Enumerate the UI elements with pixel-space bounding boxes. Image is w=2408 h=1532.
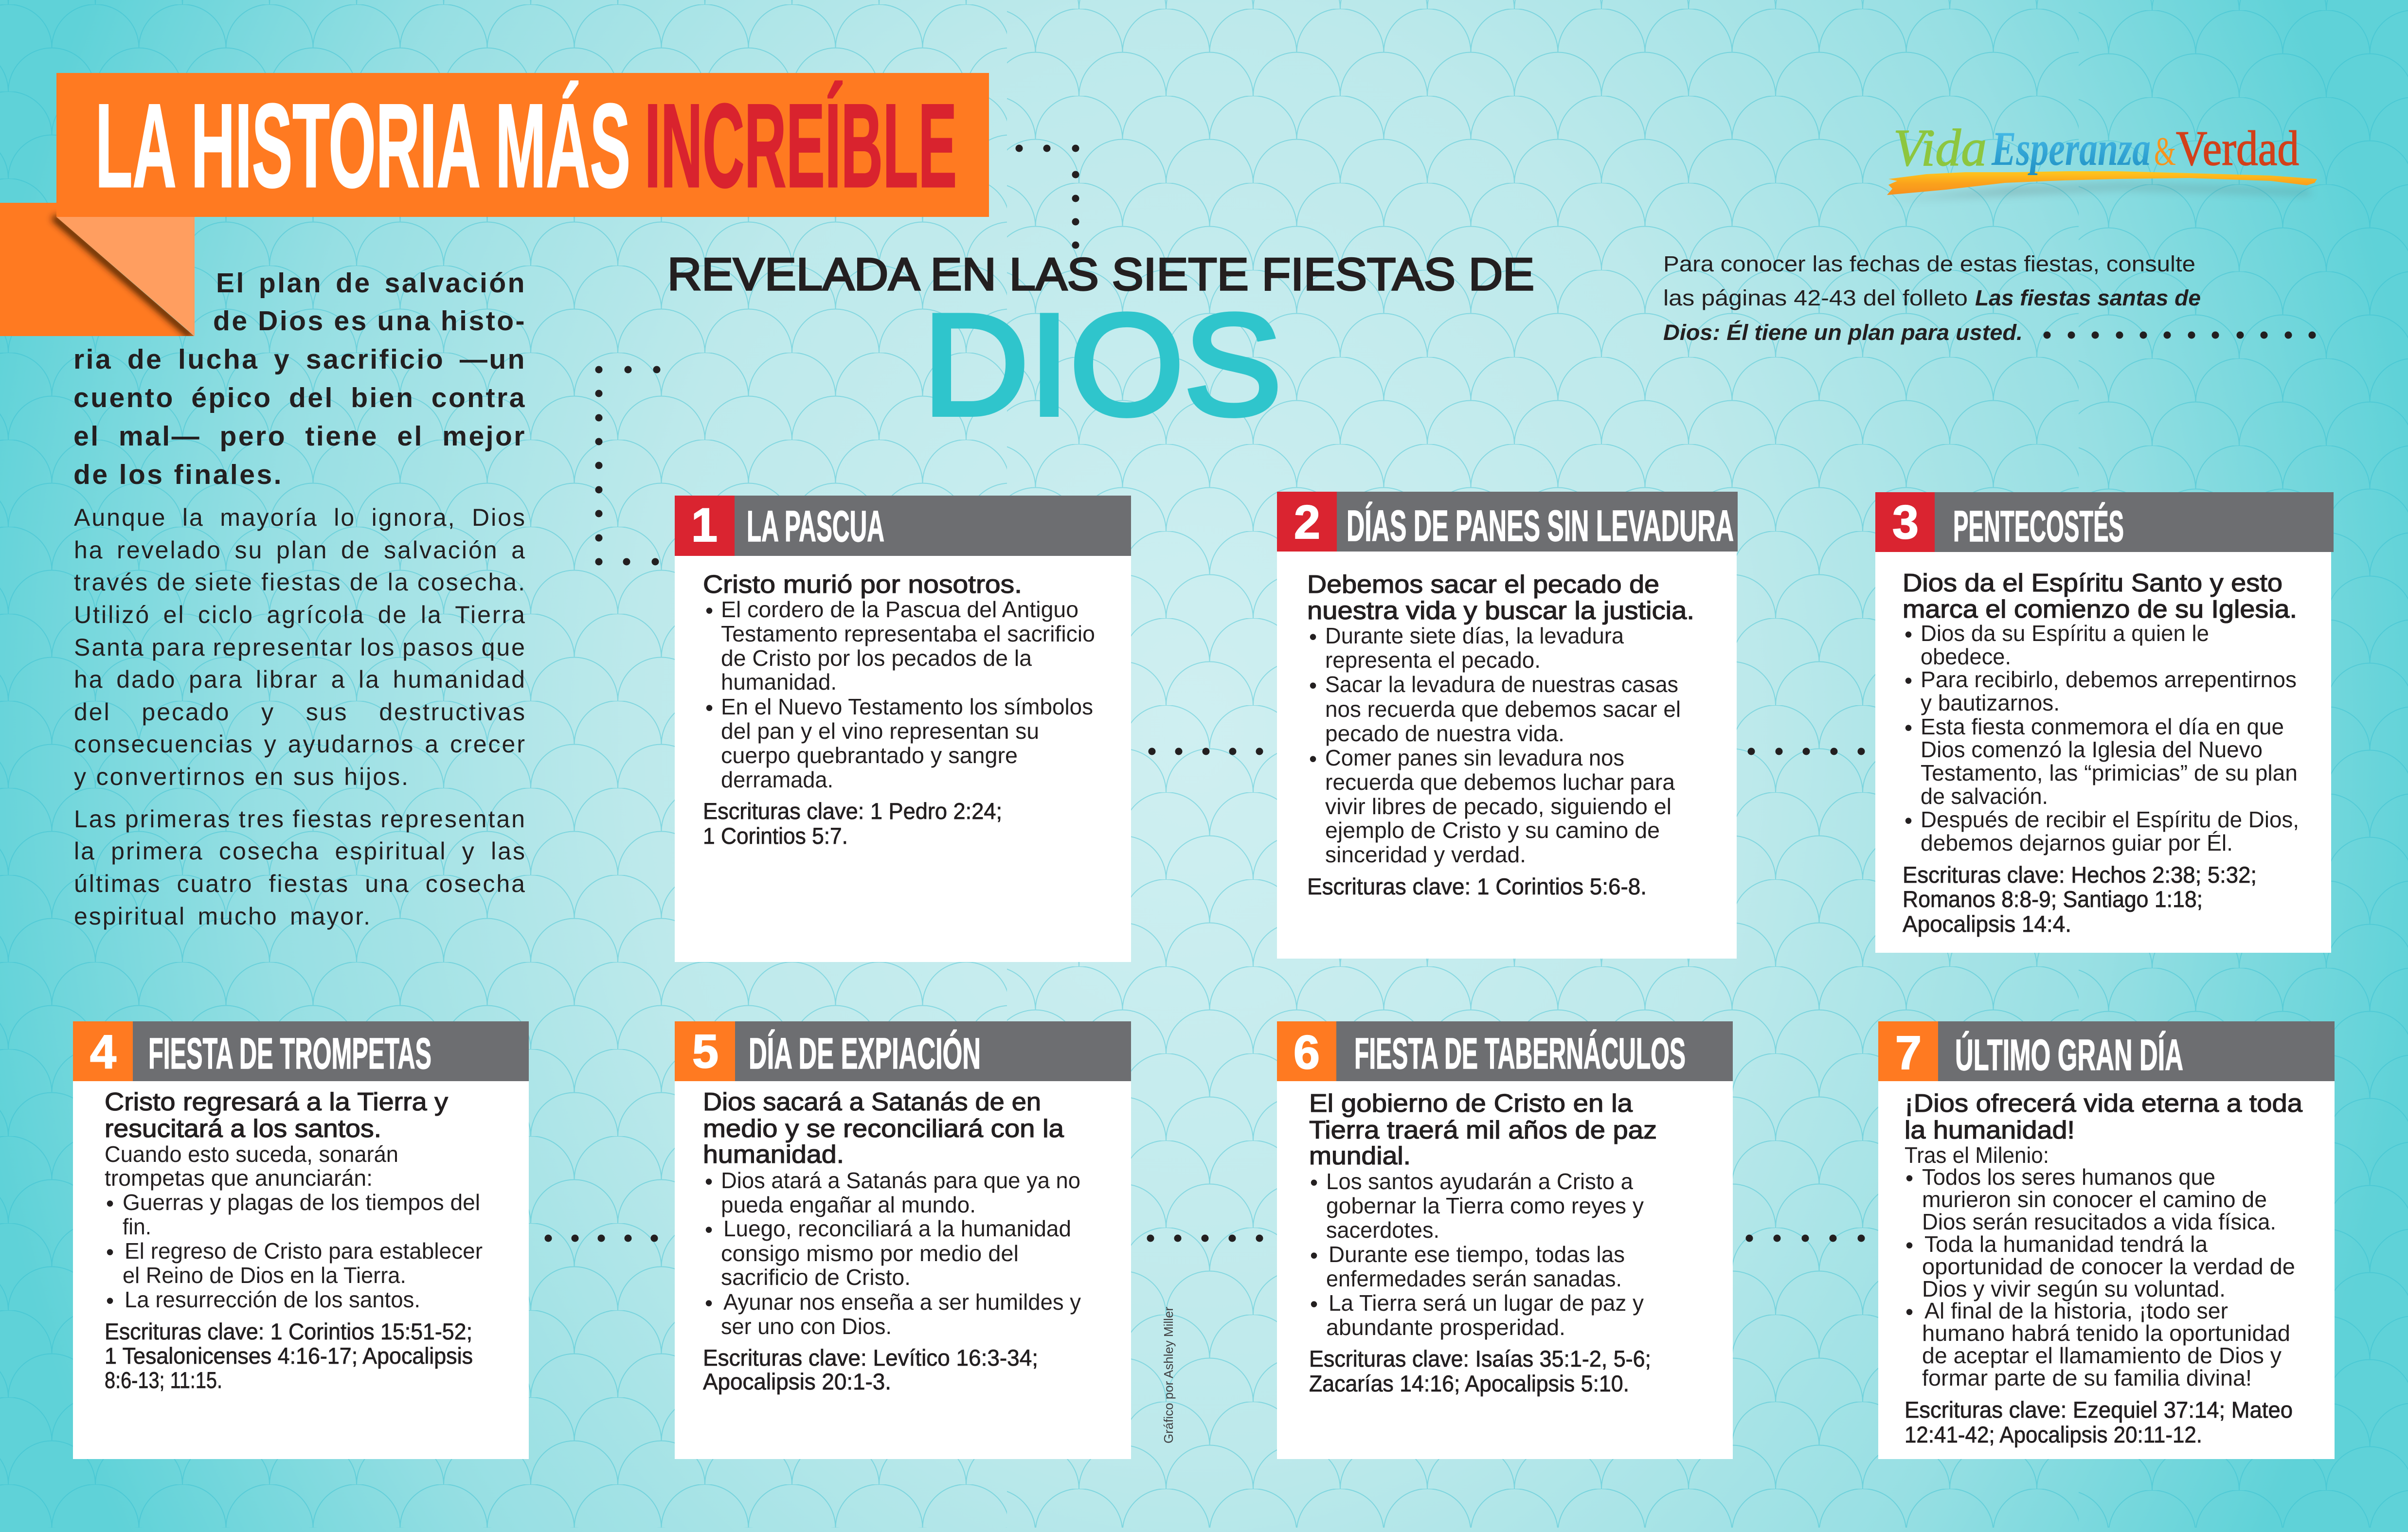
panel: card 7 Último Gran Día: Al final de la historia, ¡todo ser [1924,1298,2228,1323]
note: festival dates: las páginas 42-43 del folleto [1663,285,1968,310]
panel: card 6 Fiesta de Tabernáculos [1277,1021,1733,1459]
panel: card 7 Último Gran Día: ÚLTIMO GRAN DÍA [1955,1031,2183,1080]
panel: card 7 Último Gran Día: formar parte de su familia divina! [1922,1365,2252,1390]
panel: card 4 Fiesta de Trompetas: El regreso de Cristo para establecer [125,1238,483,1264]
dotted connector: card 6 to card 7 [1745,1234,1865,1242]
panel: card 7 Último Gran Día: Dios y vivir según su voluntad. [1922,1276,2226,1301]
panel: card 2 Días de panes sin levadura: Debemos sacar el pecado de [1307,570,1659,599]
panel: card 7 Último Gran Día: Dios serán resucitados a vida física. [1922,1209,2276,1234]
panel: card 2 Días de panes sin levadura: representa el pecado. [1325,647,1541,673]
heading: DIOS: DIOS [923,284,1282,445]
panel: card 6 Fiesta de Tabernáculos: • [1310,1291,1318,1317]
panel: card 4 Fiesta de Trompetas: • [106,1239,114,1265]
panel: card 5 Día de Expiación: humanidad. [703,1140,844,1169]
dotted connector: card 4 to card 5 [545,1234,658,1242]
panel: card 1 La Pascua: Cristo murió por nosotros. [703,570,1022,599]
panel: card 2 Días de panes sin levadura: Durante siete días, la levadura [1325,623,1624,648]
panel: card 5 Día de Expiación: Dios atará a Satanás para que ya no [721,1168,1080,1193]
intro: bold lead paragraph: de los finales. [73,459,283,490]
logo: Vida Esperanza y Verdad: Verdad [2176,121,2299,176]
panel: card 4 Fiesta de Trompetas: 4 [90,1025,116,1078]
panel: card 6 Fiesta de Tabernáculos: • [1310,1170,1318,1195]
intro: body text: Aunque la mayoría lo ignora, Dios [74,504,526,531]
panel: card 5 Día de Expiación [675,1021,1131,1459]
dotted connector: card 5 to card 6 [1147,1234,1263,1242]
panel: card 3 Pentecostés: PENTECOSTÉS [1953,502,2124,551]
panel: card 1 La Pascua: humanidad. [721,669,837,695]
panel: card 1 La Pascua: Testamento representaba el sacrificio [721,621,1095,646]
panel: card 2 Días de panes sin levadura: Comer panes sin levadura nos [1325,745,1624,770]
panel: card 7 Último Gran Día: humano habrá tenido la oportunidad [1922,1320,2290,1346]
panel: card 1 La Pascua: En el Nuevo Testamento los símbolos [721,694,1093,719]
panel: card 4 Fiesta de Trompetas: el Reino de Dios en la Tierra. [123,1263,406,1288]
panel: card 2 Días de panes sin levadura: Escrituras clave: 1 Corintios 5:6-8. [1307,873,1647,899]
panel: card 3 Pentecostés: • [1905,715,1912,740]
panel: card 3 Pentecostés: de salvación. [1921,784,2048,809]
panel: card 3 Pentecostés: Dios da el Espíritu Santo y esto [1903,569,2282,597]
panel: card 3 Pentecostés: Testamento, las “primicias” de su plan [1921,760,2298,785]
panel: card 5 Día de Expiación: 5 [692,1025,719,1078]
panel: card 4 Fiesta de Trompetas: • [106,1288,114,1313]
logo: Vida Esperanza y Verdad: & [2154,129,2176,174]
panel: card 6 Fiesta de Tabernáculos: Zacarías 14:16; Apocalipsis 5:10. [1309,1371,1629,1396]
panel: card 1 La Pascua: 1 [691,499,718,552]
panel: card 4 Fiesta de Trompetas: Cristo regresará a la Tierra y [105,1088,448,1116]
panel: card 3 Pentecostés: Dios da su Espíritu a quien le [1921,621,2209,646]
intro: body text: del pecado y sus destructivas [74,698,526,726]
panel: card 5 Día de Expiación: • [705,1217,713,1242]
panel: card 7 Último Gran Día: • [1905,1232,1913,1258]
panel: card 6 Fiesta de Tabernáculos: La Tierra será un lugar de paz y [1329,1290,1644,1316]
panel: card 5 Día de Expiación: Luego, reconciliará a la humanidad [723,1216,1071,1241]
panel: card 3 Pentecostés: Apocalipsis 14:4. [1903,911,2071,937]
panel: card 6 Fiesta de Tabernáculos: Los santos ayudarán a Cristo a [1326,1169,1633,1194]
panel: card 6 Fiesta de Tabernáculos: mundial. [1309,1142,1411,1170]
panel: card 1 La Pascua: LA PASCUA [747,502,884,551]
title banner: INCREÍBLE [645,79,957,212]
note: festival dates: Dios: Él tiene un plan para usted. [1663,320,2023,345]
panel: card 5 Día de Expiación: • [705,1169,713,1194]
panel: card 4 Fiesta de Trompetas: Escrituras clave: 1 Corintios 15:51-52; [105,1318,472,1344]
panel: card 7 Último Gran Día [1878,1021,2335,1459]
panel: card 5 Día de Expiación: Apocalipsis 20:1-3. [703,1369,891,1394]
intro: body text: y convertirnos en sus hijos. [74,763,410,790]
panel: card 7 Último Gran Día: murieron sin conocer el camino de [1922,1187,2267,1212]
panel: card 1 La Pascua: • [705,695,713,720]
panel: card 5 Día de Expiación: pueda engañar al mundo. [721,1192,976,1217]
panel: card 3 Pentecostés: Escrituras clave: Hechos 2:38; 5:32; [1903,862,2257,888]
note: festival dates [1663,251,2201,345]
panel: card 2 Días de panes sin levadura: ejemplo de Cristo y su camino de [1325,818,1660,843]
intro: body text: la primera cosecha espiritual y las [74,837,526,865]
panel: card 2 Días de panes sin levadura: Sacar la levadura de nuestras casas [1325,672,1678,697]
panel: card 3 Pentecostés: • [1905,808,1912,833]
panel: card 1 La Pascua [675,496,1131,962]
intro: bold lead paragraph [73,267,526,490]
title banner: LA HISTORIA MÁS [95,79,630,212]
panel: card 6 Fiesta de Tabernáculos: sacerdotes. [1326,1217,1439,1243]
note: festival dates: Las fiestas santas de [1975,285,2201,310]
panel: card 4 Fiesta de Trompetas: • [106,1191,114,1216]
panel: card 4 Fiesta de Trompetas: FIESTA DE TROMPETAS [148,1030,431,1078]
panel: card 2 Días de panes sin levadura: pecado de nuestra vida. [1325,721,1564,746]
intro: body text: Santa para representar los pasos que [74,634,526,661]
panel: card 1 La Pascua: cuerpo quebrantado y sangre [721,743,1018,768]
panel: card 7 Último Gran Día: • [1905,1165,1913,1191]
logo: Vida Esperanza y Verdad [1887,119,2317,199]
logo: Vida Esperanza y Verdad: Esperanza [1991,122,2151,176]
panel: card 3 Pentecostés: Después de recibir el Espíritu de Dios, [1921,807,2299,832]
panel: card 7 Último Gran Día: oportunidad de conocer la verdad de [1922,1254,2295,1279]
intro: body text [74,504,526,930]
dotted connector: card 2 to card 3 [1747,748,1865,755]
panel: card 3 Pentecostés: obedece. [1921,644,2011,669]
intro: body text: Las primeras tres fiestas representan [74,805,526,833]
panel: card 5 Día de Expiación: sacrificio de Cristo. [721,1265,911,1290]
panel: card 4 Fiesta de Trompetas: fin. [123,1214,151,1239]
panel: card 1 La Pascua: derramada. [721,767,833,792]
intro: body text: espiritual mucho mayor. [74,903,372,930]
panel: card 2 Días de panes sin levadura: nuestra vida y buscar la justicia. [1307,597,1694,625]
note: festival dates: Para conocer las fechas de estas fiestas, consulte [1663,251,2195,276]
panel: card 5 Día de Expiación: consigo mismo por medio del [721,1241,1019,1266]
panel: card 3 Pentecostés: Dios comenzó la Iglesia del Nuevo [1921,737,2263,762]
logo: Vida Esperanza y Verdad: Vida [1893,119,1987,177]
intro: body text: últimas cuatro fiestas una cosecha [74,870,526,897]
panel: card 7 Último Gran Día: la humanidad! [1905,1116,2075,1144]
panel: card 5 Día de Expiación: ser uno con Dios. [721,1314,892,1339]
panel: card 2 Días de panes sin levadura: recuerda que debemos luchar para [1325,769,1675,795]
intro: bold lead paragraph: de Dios es una histo- [213,305,526,337]
panel: card 2 Días de panes sin levadura: DÍAS DE PANES SIN LEVADURA [1347,501,1734,551]
panel: card 6 Fiesta de Tabernáculos: FIESTA DE TABERNÁCULOS [1354,1029,1686,1078]
panel: card 6 Fiesta de Tabernáculos: Durante ese tiempo, todas las [1329,1242,1625,1267]
panel: card 3 Pentecostés [1875,492,2334,953]
panel: card 2 Días de panes sin levadura [1277,492,1738,959]
panel: card 6 Fiesta de Tabernáculos: abundante prosperidad. [1326,1315,1565,1340]
panel: card 7 Último Gran Día: Todos los seres humanos que [1922,1164,2215,1190]
panel: card 6 Fiesta de Tabernáculos: El gobierno de Cristo en la [1309,1089,1633,1118]
panel: card 2 Días de panes sin levadura: nos recuerda que debemos sacar el [1325,696,1681,722]
panel: card 7 Último Gran Día: • [1905,1299,1913,1324]
panel: card 4 Fiesta de Trompetas [73,1021,529,1459]
panel: card 2 Días de panes sin levadura: • [1309,746,1317,771]
intro: body text: través de siete fiestas de la cosecha. [74,569,526,596]
intro: bold lead paragraph: El plan de salvación [216,267,526,299]
panel: card 6 Fiesta de Tabernáculos: Tierra traerá mil años de paz [1309,1116,1657,1144]
panel: card 7 Último Gran Día: Toda la humanidad tendrá la [1924,1231,2208,1257]
dotted connector: note to card 3 [2043,332,2316,338]
panel: card 1 La Pascua: de Cristo por los pecados de la [721,645,1032,671]
panel: card 7 Último Gran Día: de aceptar el llamamiento de Dios y [1922,1343,2282,1368]
dotted connector: card 1 to card 2 [1148,748,1263,755]
panel: card 5 Día de Expiación: • [705,1290,713,1316]
panel: card 1 La Pascua: Escrituras clave: 1 Pedro 2:24; [703,798,1002,824]
panel: card 7 Último Gran Día: Escrituras clave: Ezequiel 37:14; Mateo [1905,1397,2293,1423]
panel: card 7 Último Gran Día: ¡Dios ofrecerá vida eterna a toda [1905,1089,2302,1118]
folded corner of title banner [0,203,195,336]
panel: card 7 Último Gran Día: Tras el Milenio: [1905,1142,2049,1168]
intro: bold lead paragraph: ria de lucha y sacrificio —un [73,344,526,375]
panel: card 2 Días de panes sin levadura: • [1309,624,1317,649]
panel: card 3 Pentecostés: Romanos 8:8-9; Santiago 1:18; [1903,886,2203,912]
panel: card 1 La Pascua: El cordero de la Pascua del Antiguo [721,597,1078,622]
panel: card 4 Fiesta de Trompetas: 8:6-13; 11:15. [105,1367,222,1393]
panel: card 6 Fiesta de Tabernáculos: • [1310,1243,1318,1268]
panel: card 5 Día de Expiación: medio y se reconciliará con la [703,1115,1064,1143]
panel: card 3 Pentecostés: 3 [1892,496,1919,549]
panel: card 5 Día de Expiación: DÍA DE EXPIACIÓN [749,1029,981,1078]
panel: card 3 Pentecostés: • [1905,622,1912,647]
panel: card 2 Días de panes sin levadura: • [1309,673,1317,698]
panel: card 6 Fiesta de Tabernáculos: gobernar la Tierra como reyes y [1326,1193,1644,1218]
panel: card 6 Fiesta de Tabernáculos: Escrituras clave: Isaías 35:1-2, 5-6; [1309,1346,1651,1372]
panel: card 3 Pentecostés: y bautizarnos. [1921,690,2060,715]
panel: card 3 Pentecostés: debemos dejarnos guiar por Él. [1921,830,2233,855]
panel: card 6 Fiesta de Tabernáculos: enfermedades serán sanadas. [1326,1266,1622,1291]
panel: card 3 Pentecostés: Esta fiesta conmemora el día en que [1921,714,2284,739]
panel: card 4 Fiesta de Trompetas: Guerras y plagas de los tiempos del [123,1190,480,1215]
intro: bold lead paragraph: el mal— pero tiene el mejor [73,421,526,452]
panel: card 6 Fiesta de Tabernáculos: 6 [1294,1026,1320,1079]
panel: card 2 Días de panes sin levadura: sinceridad y verdad. [1325,842,1526,867]
panel: card 4 Fiesta de Trompetas: resucitará a los santos. [105,1115,381,1143]
panel: card 3 Pentecostés: marca el comienzo de su Iglesia. [1903,595,2297,623]
panel: card 5 Día de Expiación: Ayunar nos enseña a ser humildes y [723,1289,1081,1315]
credit: Gráfico por Ashley Miller: Gráfico por Ashley Miller [1161,1307,1176,1443]
dotted connector: title to subtitle [1016,145,1079,249]
panel: card 4 Fiesta de Trompetas: 1 Tesalonicenses 4:16-17; Apocalipsis [105,1343,473,1369]
panel: card 1 La Pascua: • [705,598,713,623]
panel: card 1 La Pascua: del pan y el vino representan su [721,718,1039,744]
panel: card 2 Días de panes sin levadura: 2 [1294,496,1320,549]
panel: card 3 Pentecostés: Para recibirlo, debemos arrepentirnos [1921,667,2297,692]
intro: body text: Utilizó el ciclo agrícola de la Tierra [74,601,526,628]
panel: card 3 Pentecostés: • [1905,668,1912,693]
panel: card 1 La Pascua: 1 Corintios 5:7. [703,823,848,849]
subtitle: REVELADA EN LAS SIETE FIESTAS DE [667,249,1534,300]
panel: card 4 Fiesta de Trompetas: trompetas que anunciarán: [105,1165,373,1191]
panel: card 7 Último Gran Día: 7 [1895,1026,1922,1079]
intro: bold lead paragraph: cuento épico del bien contra [73,382,526,413]
dotted connector: intro to card 1 [595,366,661,565]
panel: card 5 Día de Expiación: Escrituras clave: Levítico 16:3-34; [703,1345,1038,1371]
intro: body text: consecuencias y ayudarnos a crecer [74,730,526,758]
panel: card 4 Fiesta de Trompetas: Cuando esto suceda, sonarán [105,1141,398,1167]
intro: body text: ha revelado su plan de salvación a [74,536,526,564]
panel: card 4 Fiesta de Trompetas: La resurrección de los santos. [125,1287,420,1312]
intro: body text: ha dado para librar a la humanidad [74,666,526,693]
panel: card 2 Días de panes sin levadura: vivir libres de pecado, siguiendo el [1325,794,1671,819]
panel: card 5 Día de Expiación: Dios sacará a Satanás de en [703,1088,1041,1116]
panel: card 7 Último Gran Día: 12:41-42; Apocalipsis 20:11-12. [1905,1422,2202,1447]
